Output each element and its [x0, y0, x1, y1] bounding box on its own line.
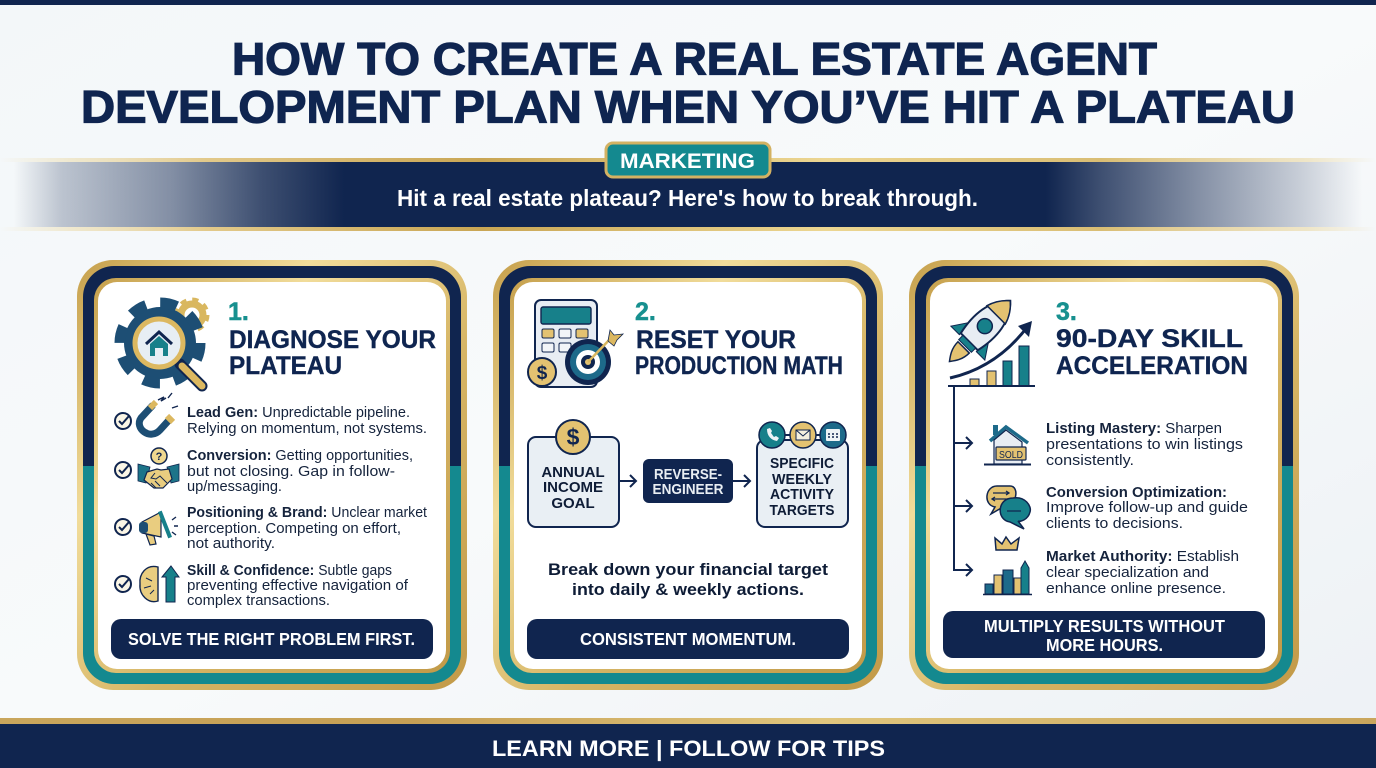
- flow box: weekly activity targets: WEEKLY: [772, 471, 832, 488]
- flow box: weekly activity targets: TARGETS: [770, 502, 834, 519]
- title: HOW TO CREATE A REAL ESTATE AGENT: [232, 34, 1157, 84]
- item: listing mastery: presentations to win listings: [1046, 437, 1243, 453]
- item: conversion: [115, 448, 413, 495]
- item: conversion optimization: Conversion Optimization:: [1046, 485, 1227, 501]
- item: conversion optimization: [987, 485, 1248, 532]
- item: positioning and brand: not authority.: [187, 536, 275, 552]
- item: market authority: clear specialization and: [1046, 565, 1209, 581]
- icon: calculator and target: [528, 300, 623, 387]
- text block: [548, 560, 828, 599]
- callout: SOLVE THE RIGHT PROBLEM FIRST.: [128, 629, 415, 649]
- item: conversion optimization: clients to decisions.: [1046, 516, 1183, 532]
- flow box: reverse-engineer: [643, 459, 733, 503]
- item: lead gen: Lead Gen: Unpredictable pipeline.: [187, 405, 410, 421]
- item: positioning and brand: Positioning & Brand: Unclear market: [187, 505, 427, 521]
- item: market authority: [983, 537, 1239, 597]
- flow box: weekly activity targets: [757, 422, 848, 527]
- callout: MORE HOURS.: [1046, 635, 1163, 655]
- item: positioning and brand: [115, 505, 427, 552]
- heading: PLATEAU: [229, 352, 342, 380]
- panel: 90-day skill acceleration: [909, 260, 1299, 690]
- icon: rocket and growth chart: [933, 284, 1035, 386]
- item: listing mastery: [984, 421, 1243, 469]
- heading: ACCELERATION: [1056, 352, 1248, 380]
- flow box: annual income goal: ANNUAL: [541, 464, 605, 481]
- step number: 3.: [1056, 298, 1077, 326]
- title: DEVELOPMENT PLAN WHEN YOU’VE HIT A PLATEAU: [81, 82, 1295, 132]
- text block: Break down your financial target: [548, 560, 828, 579]
- category badge: MARKETING: [620, 150, 755, 173]
- flow box: annual income goal: GOAL: [551, 495, 595, 512]
- step number: 1.: [228, 298, 249, 326]
- item: market authority: enhance online presence.: [1046, 581, 1226, 597]
- item: lead gen: Relying on momentum, not systems.: [187, 421, 427, 437]
- heading: [635, 326, 843, 380]
- flow box: annual income goal: INCOME: [543, 479, 603, 496]
- item: listing mastery: consistently.: [1046, 453, 1134, 469]
- icon: gear with magnifier: [120, 300, 207, 386]
- flow box: weekly activity targets: ACTIVITY: [770, 486, 834, 503]
- footer bar: LEARN MORE | FOLLOW FOR TIPS: [492, 736, 885, 761]
- item: conversion: but not closing. Gap in follow-: [187, 464, 395, 480]
- panel: diagnose your plateau: [77, 260, 467, 690]
- category badge: [606, 143, 770, 177]
- step number: 2.: [635, 298, 656, 326]
- item: listing mastery: SOLD: [999, 449, 1023, 461]
- callout: MULTIPLY RESULTS WITHOUT: [984, 616, 1225, 636]
- arrow: [733, 475, 750, 487]
- flow box: reverse-engineer: ENGINEER: [652, 481, 724, 498]
- callout: [111, 619, 433, 659]
- item: lead gen: [115, 393, 427, 437]
- flow box: annual income goal: $: [567, 424, 580, 450]
- flow box: annual income goal: [528, 420, 619, 527]
- item: listing mastery: Listing Mastery: Sharpen: [1046, 421, 1222, 437]
- callout: [527, 619, 849, 659]
- text block: into daily & weekly actions.: [572, 580, 804, 599]
- subtitle banner: Hit a real estate plateau? Here's how to break through.: [397, 185, 978, 211]
- subtitle banner: [0, 158, 1376, 231]
- flow box: weekly activity targets: SPECIFIC: [770, 455, 834, 472]
- item: positioning and brand: perception. Competing on effort,: [187, 521, 401, 537]
- callout: CONSISTENT MOMENTUM.: [580, 629, 796, 649]
- item: skill and confidence: complex transactions.: [187, 593, 330, 609]
- item: conversion: ?: [156, 451, 163, 463]
- item: conversion: Conversion: Getting opportunities,: [187, 448, 413, 464]
- footer bar: [0, 718, 1376, 768]
- item: skill and confidence: preventing effective navigation of: [187, 578, 409, 594]
- item: skill and confidence: [115, 563, 409, 609]
- arrow: [619, 475, 636, 487]
- heading: PRODUCTION MATH: [635, 352, 843, 380]
- heading: RESET YOUR: [636, 326, 796, 354]
- callout: [943, 611, 1265, 658]
- item: conversion: up/messaging.: [187, 479, 282, 495]
- heading: [1056, 325, 1248, 380]
- flow box: reverse-engineer: REVERSE-: [654, 466, 722, 483]
- icon: calculator and target: $: [537, 363, 548, 384]
- item: conversion optimization: Improve follow-up and guide: [1046, 500, 1248, 516]
- title: [81, 34, 1295, 132]
- heading: 90-DAY SKILL: [1056, 325, 1243, 353]
- item: market authority: Market Authority: Establish: [1046, 549, 1239, 565]
- heading: [229, 326, 436, 380]
- panel: reset your production math: [493, 260, 883, 690]
- arrow tree: [954, 386, 972, 576]
- heading: DIAGNOSE YOUR: [229, 326, 436, 354]
- item: skill and confidence: Skill & Confidence: Subtle gaps: [187, 563, 392, 579]
